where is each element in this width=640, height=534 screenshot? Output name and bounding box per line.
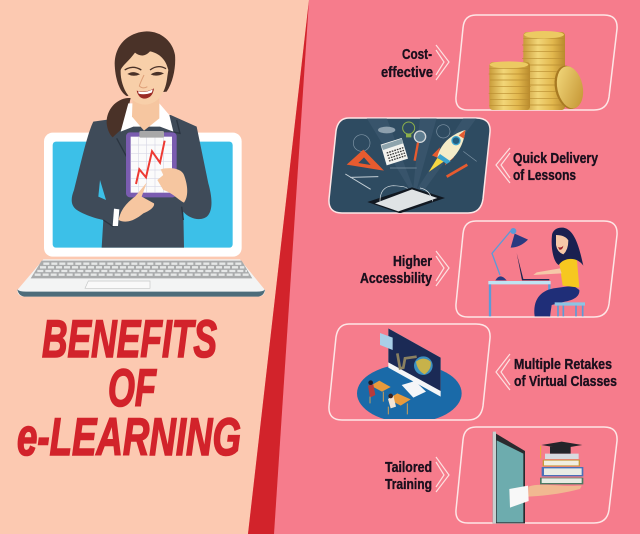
label: Accessbility (360, 271, 432, 287)
ponytail (107, 98, 131, 137)
icon: education tools (345, 118, 477, 213)
label: effective (381, 65, 433, 81)
neck (132, 95, 159, 131)
hair back (115, 31, 175, 96)
eyebrows (125, 67, 166, 70)
panel fill (329, 118, 490, 213)
chevron (496, 148, 510, 183)
panel: quick delivery of lessons (329, 118, 598, 213)
label: Multiple Retakes (514, 357, 612, 373)
label: Training (385, 477, 432, 493)
arm gap (98, 180, 106, 200)
title line: BENEFITS: BENEFITS (42, 310, 217, 369)
label (360, 254, 432, 287)
panel outline (456, 15, 617, 110)
title line: OF: OF (108, 359, 157, 418)
red diagonal stripe (248, 0, 309, 534)
panel outline (456, 221, 617, 317)
jacket (72, 115, 211, 248)
panel outline (329, 324, 490, 420)
laptop blue screen (53, 142, 233, 248)
jacket shading (103, 120, 183, 227)
title (17, 310, 241, 467)
face (121, 51, 168, 105)
label (514, 357, 617, 390)
hand right (157, 168, 187, 203)
label (381, 47, 433, 81)
label: Cost- (402, 47, 432, 63)
label (513, 151, 598, 184)
nose (139, 75, 147, 88)
background: peach panel (0, 0, 309, 534)
panel: higher accessibility (360, 221, 617, 317)
label: of Virtual Classes (514, 374, 617, 390)
shirt cuff (113, 209, 119, 226)
icon: virtual classroom (357, 328, 462, 423)
label: Quick Delivery (513, 151, 598, 167)
icon: gold coin stacks (489, 31, 587, 112)
panel: multiple retakes of virtual classes (329, 324, 617, 423)
panel: cost-effective (381, 15, 617, 112)
laptop screen frame (44, 133, 242, 257)
label: Tailored (385, 460, 432, 476)
clipboard (126, 131, 177, 197)
title line: e-LEARNING: e-LEARNING (17, 408, 241, 467)
chevron (436, 45, 449, 80)
chevron (436, 457, 449, 492)
chevron (436, 251, 449, 286)
smile (137, 88, 154, 99)
hand pointing (119, 183, 154, 222)
laptop base (17, 259, 265, 297)
label: of Lessons (513, 168, 576, 184)
illustration: teacher on laptop (17, 31, 265, 297)
shirt collar (121, 103, 173, 132)
eyes (127, 72, 164, 76)
chevron (496, 354, 510, 390)
panel: tailored training (385, 427, 617, 523)
icon: woman at desk (488, 228, 585, 316)
panel outline (456, 427, 617, 523)
label (385, 460, 432, 493)
icon: tablet with hand and books (493, 432, 583, 523)
label: Higher (393, 254, 432, 270)
